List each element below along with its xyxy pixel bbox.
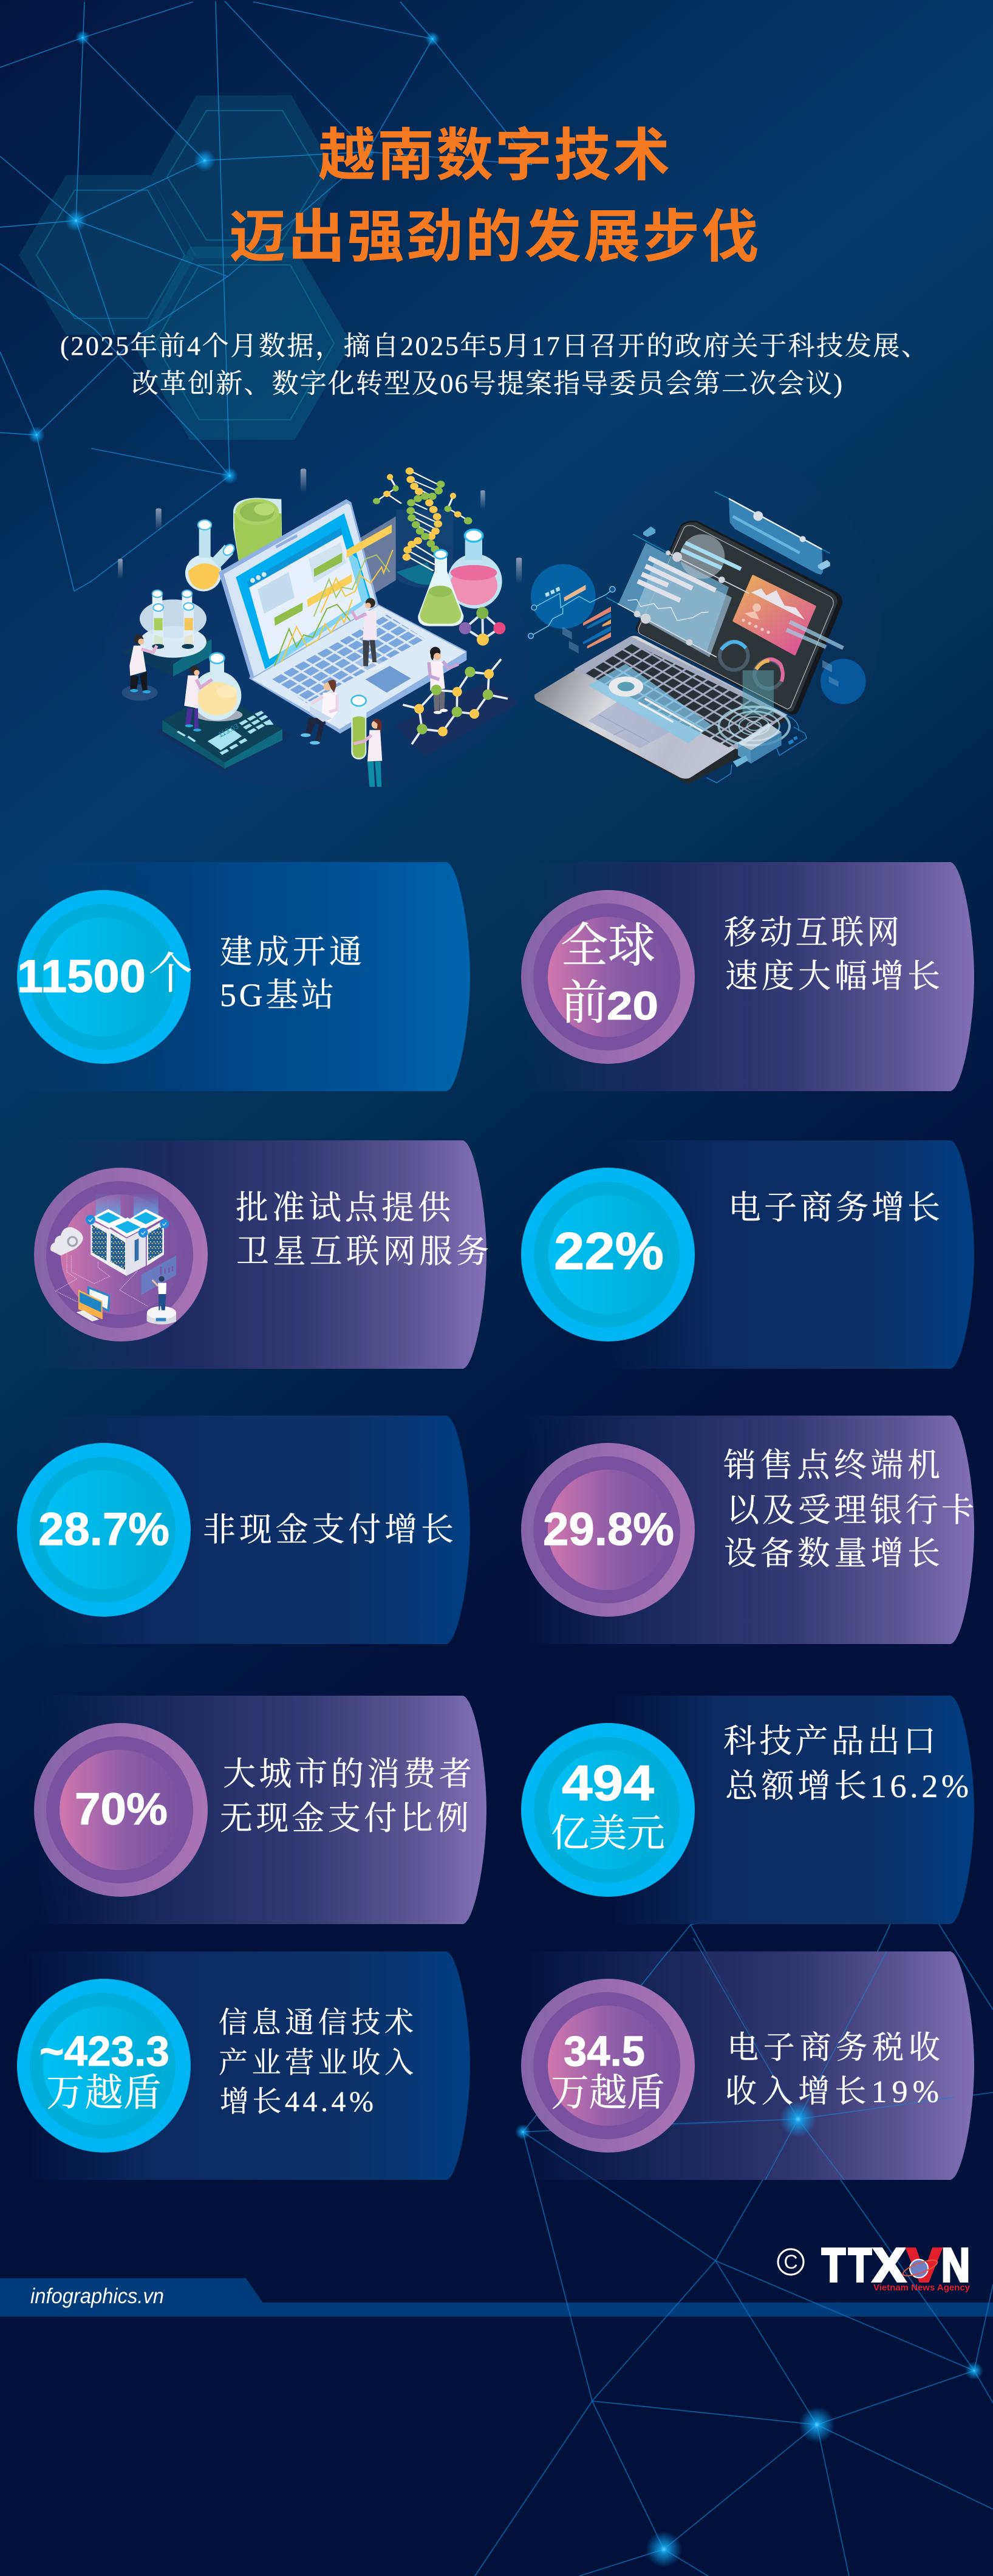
- description: 收入增长19%: [725, 2075, 939, 2109]
- badge: [521, 1979, 695, 2153]
- description: 信息通信技术: [219, 2007, 414, 2039]
- scale readout: 113.03: [217, 722, 241, 739]
- gradient card: [734, 576, 843, 654]
- description: 大城市的消费者: [223, 1756, 472, 1792]
- molecule top right: [459, 607, 505, 646]
- badge value: 22%: [554, 1222, 664, 1281]
- network lines top: [0, 1, 532, 591]
- icon: monitor: [77, 1286, 111, 1321]
- scientist on keyboard: [352, 598, 384, 670]
- description: 5G基站: [220, 977, 334, 1013]
- badge value: 20: [607, 983, 658, 1028]
- sensor box: [706, 716, 807, 783]
- description: 卫星互联网服务: [236, 1233, 489, 1270]
- copyright mark: [778, 2249, 804, 2275]
- screen chart lines: [275, 605, 350, 666]
- translucent sensor column: [743, 670, 774, 715]
- scale flask: [192, 653, 242, 721]
- green beaker: [233, 498, 282, 563]
- description: [220, 1756, 472, 1837]
- test tube rack: [140, 590, 206, 658]
- website label: infographics.vn: [30, 2284, 164, 2308]
- DNA helix: [373, 467, 472, 587]
- right backdrop disc: [572, 457, 882, 783]
- keyboard left: [271, 615, 425, 703]
- network lines over panel: [601, 1938, 954, 2180]
- panel: POS terminals: [521, 1416, 974, 1644]
- panel: 5G base stations: [17, 862, 470, 1091]
- illustration: lab and laptops: [104, 457, 882, 789]
- floating panel: [618, 543, 732, 657]
- description: 产业营业收入: [219, 2047, 414, 2079]
- panel: tech exports: [521, 1696, 974, 1924]
- ring gauges: [720, 642, 783, 688]
- subtitle: (2025年前4个月数据，摘自2025年5月17日召开的政府关于科技发展、: [60, 331, 928, 361]
- description: [723, 1447, 974, 1572]
- icon: cloud: [50, 1227, 83, 1256]
- badge: [34, 1723, 208, 1897]
- icon: analyst: [141, 1256, 176, 1324]
- yellow flask: [185, 520, 236, 591]
- green conical flask: [418, 550, 463, 626]
- badge value: 494: [562, 1755, 654, 1811]
- subtitle: 改革创新、数字化转型及06号提案指导委员会第二次会议): [132, 369, 842, 399]
- title: 迈出强劲的发展步伐: [229, 191, 759, 273]
- badge value: 万越盾: [46, 2072, 162, 2114]
- lab scale: [156, 693, 290, 772]
- agency tagline: Vietnam News Agency: [873, 2283, 971, 2293]
- chart board: [360, 516, 396, 594]
- badge value: 70%: [75, 1784, 168, 1834]
- description: 批准试点提供: [236, 1190, 451, 1226]
- scientist at scale: [184, 666, 212, 731]
- description: 移动互联网: [724, 914, 899, 951]
- test tube held: [351, 696, 366, 759]
- connector lines and nodes: [606, 534, 749, 657]
- seated scientist: [301, 680, 338, 745]
- badge value: ~423.3: [39, 2027, 169, 2075]
- description: 无现金支付比例: [220, 1800, 469, 1837]
- icon: data center: [50, 1193, 176, 1324]
- badge: [521, 890, 695, 1064]
- panel: satellite internet: [34, 1140, 489, 1369]
- panel: ICT revenue: [17, 1951, 470, 2180]
- badge value: 全球: [561, 919, 655, 972]
- agency wordmark: T: [822, 2238, 845, 2292]
- molecule bottom right: [403, 659, 508, 744]
- rack base: [121, 627, 211, 676]
- badge: [521, 1168, 695, 1341]
- translucent circle: [680, 534, 741, 579]
- badge: [34, 1168, 208, 1341]
- description: 速度大幅增长: [725, 958, 940, 995]
- description: [725, 2031, 940, 2109]
- description: [236, 1190, 489, 1270]
- description: 增长44.4%: [220, 2086, 374, 2118]
- donut: [609, 676, 643, 697]
- agency wordmark: [822, 2238, 970, 2292]
- fingerprint sensor: [718, 707, 790, 745]
- panel: cashless ratio: [34, 1696, 486, 1924]
- pink flask: [448, 530, 502, 609]
- agency wordmark: X: [873, 2238, 906, 2292]
- network lines bottom: [475, 1879, 993, 2576]
- panel: e-commerce growth: [521, 1140, 974, 1369]
- badge value: 前: [561, 976, 608, 1029]
- description: 非现金支付增长: [203, 1512, 454, 1548]
- badge value: [551, 2027, 665, 2114]
- circuit disc left: [528, 527, 655, 654]
- panel: non-cash payment: [17, 1416, 470, 1644]
- description: 建成开通: [220, 934, 362, 970]
- logo: TTXVN: [778, 2238, 971, 2293]
- laptop base: [534, 636, 788, 784]
- copyright mark: C: [783, 2251, 798, 2273]
- plate under molecule: [395, 682, 519, 756]
- panel: e-commerce tax: [521, 1938, 974, 2180]
- description: [723, 1723, 969, 1804]
- keyboard overlay: [588, 664, 712, 743]
- scientist beside laptop: [429, 647, 459, 714]
- badge: [521, 1723, 695, 1897]
- description: 销售点终端机: [723, 1447, 940, 1484]
- trackpad right: [588, 702, 670, 748]
- title: 越南数字技术: [318, 109, 670, 192]
- description: 以及受理银行卡: [726, 1492, 974, 1529]
- badge: [17, 1979, 191, 2153]
- pegs: [118, 468, 522, 584]
- description: 电子商务税收: [727, 2031, 940, 2066]
- trackpad left: [366, 666, 411, 693]
- badge value: 万越盾: [551, 2072, 665, 2114]
- badge: [17, 890, 191, 1064]
- description: [219, 2007, 414, 2118]
- badge: [17, 1443, 191, 1617]
- scientist at rack: [122, 635, 157, 701]
- badge value: [39, 2027, 169, 2114]
- subtitle: [60, 331, 928, 399]
- keyboard right: [584, 643, 783, 747]
- description: 电子商务增长: [728, 1190, 940, 1226]
- title: [229, 109, 759, 273]
- agency wordmark: V: [907, 2238, 941, 2292]
- description: 总额增长16.2%: [725, 1768, 969, 1804]
- badge: [521, 1443, 695, 1617]
- badge value: 11500: [17, 951, 146, 1002]
- circle right: [821, 659, 866, 704]
- badge value: 29.8%: [543, 1504, 674, 1555]
- laptop screen: [636, 521, 842, 714]
- description: 设备数量增长: [724, 1535, 940, 1572]
- description: 科技产品出口: [723, 1723, 936, 1759]
- hexagons decoration: [19, 95, 352, 440]
- left backdrop disc: [104, 518, 530, 789]
- badge value: [551, 1755, 665, 1855]
- footer bar: [0, 2278, 993, 2317]
- floating top panel: [715, 492, 830, 575]
- badge value: 28.7%: [38, 1504, 169, 1555]
- badge value: 个: [149, 950, 193, 998]
- agency wordmark: T: [848, 2238, 872, 2292]
- panel: mobile internet: [521, 862, 974, 1091]
- laptop left: [219, 499, 466, 733]
- scientist with tube: [354, 719, 382, 787]
- globe: [901, 2257, 939, 2279]
- agency wordmark: N: [941, 2238, 970, 2292]
- badge value: 34.5: [564, 2027, 645, 2075]
- badge value: [561, 919, 658, 1029]
- badge value: 亿美元: [551, 1812, 665, 1855]
- description: [724, 914, 940, 995]
- description: [220, 934, 362, 1013]
- server towers: [86, 1209, 169, 1276]
